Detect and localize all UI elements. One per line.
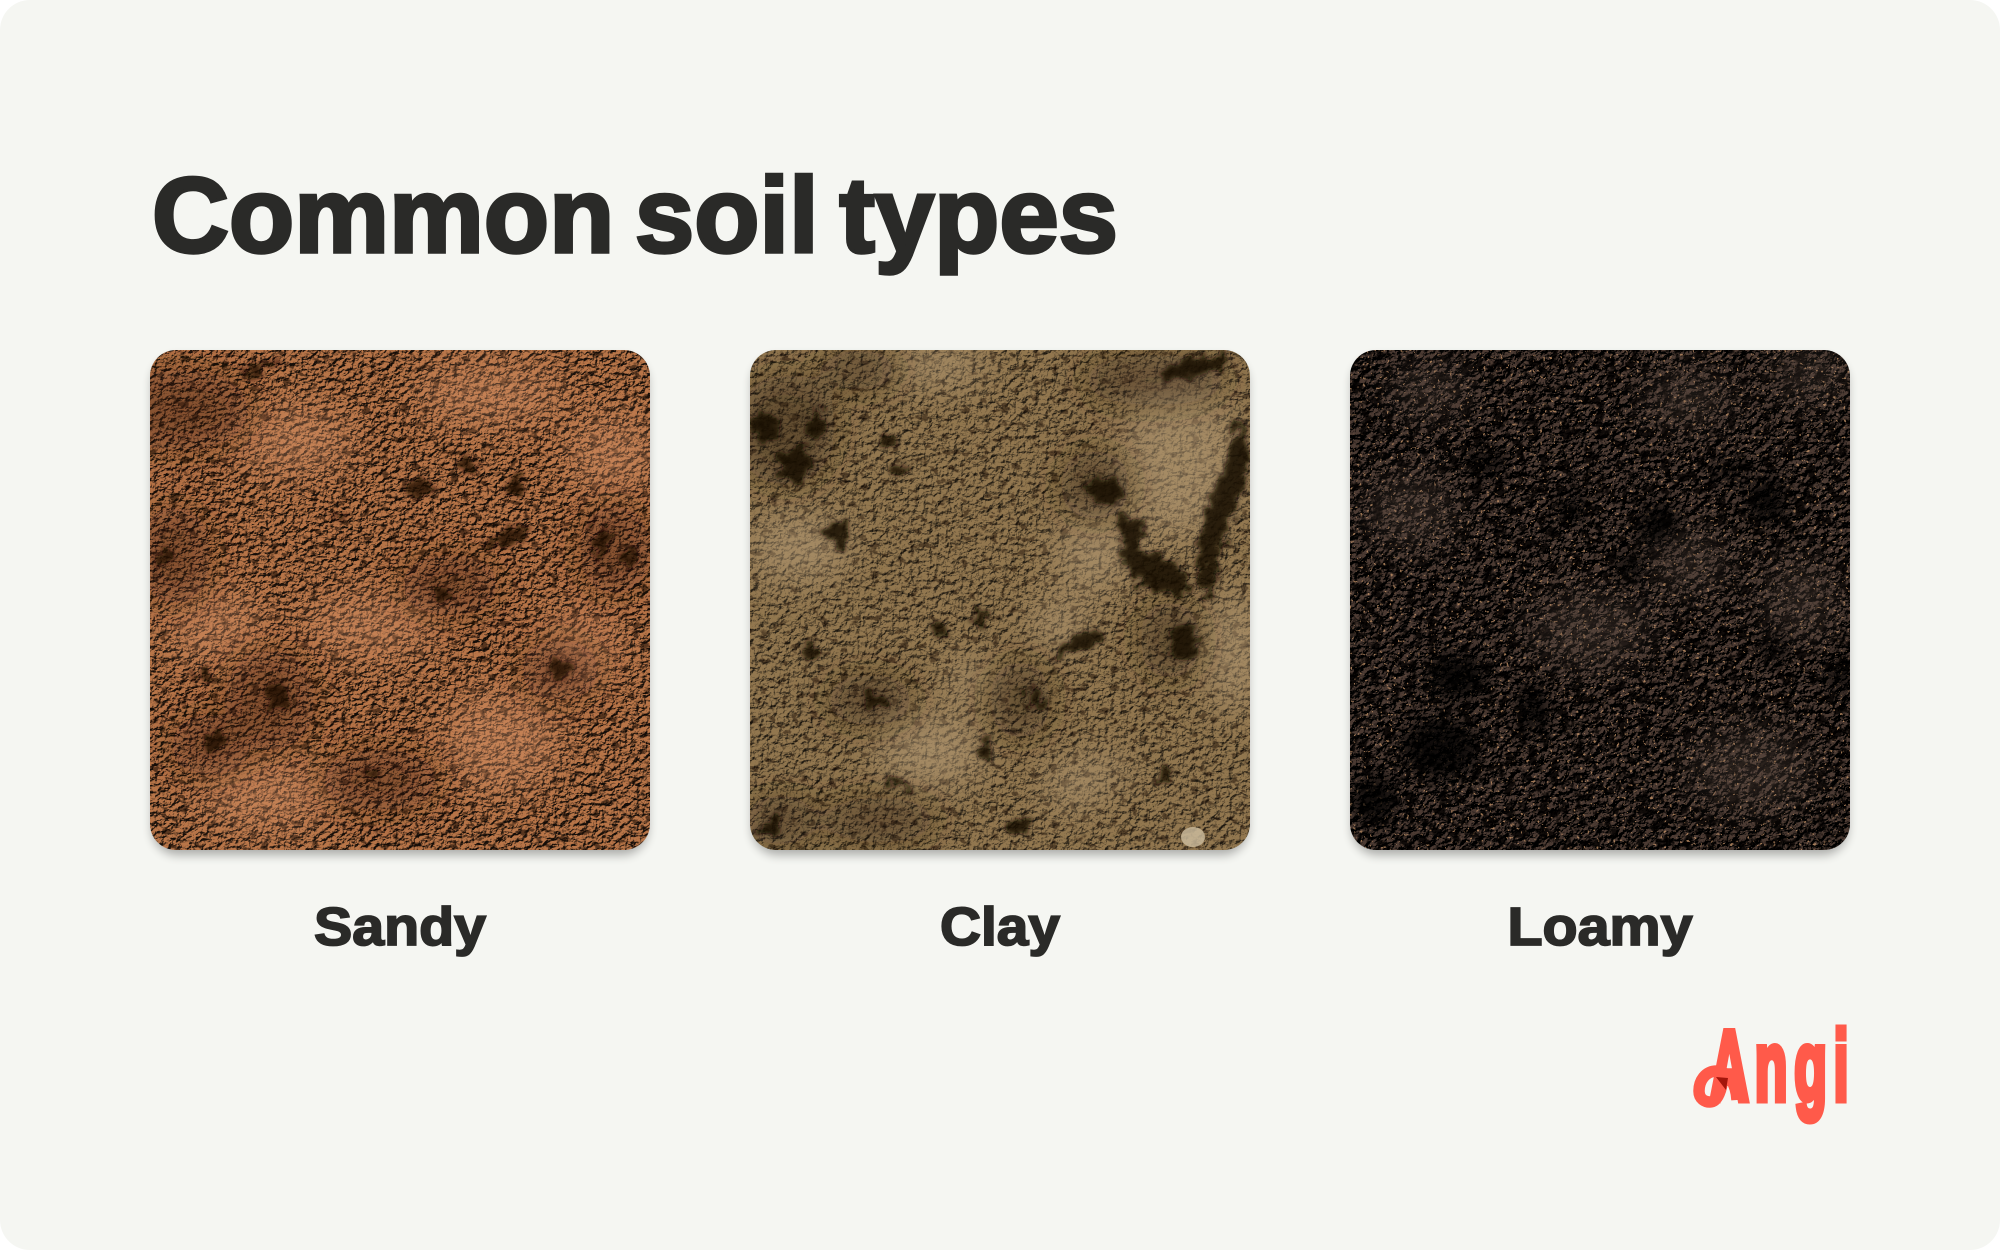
panel: clay soil	[735, 346, 1263, 957]
logo wordmark: Angi	[1710, 1010, 1849, 1121]
panel: sandy soil	[110, 350, 657, 957]
photo: clay soil	[735, 346, 1263, 855]
title: Common soil types	[152, 155, 1118, 275]
logo loop	[1699, 1071, 1737, 1102]
label: Clay: Clay	[940, 897, 1060, 957]
logo loop overlap	[1716, 1077, 1728, 1090]
panel: loamy soil	[1350, 350, 1853, 957]
label: Loamy: Loamy	[1508, 897, 1692, 957]
photo: sandy soil	[110, 350, 657, 855]
logo: Angi	[1699, 1010, 1849, 1121]
photo: loamy soil	[1350, 350, 1853, 855]
label: Sandy: Sandy	[314, 897, 486, 957]
